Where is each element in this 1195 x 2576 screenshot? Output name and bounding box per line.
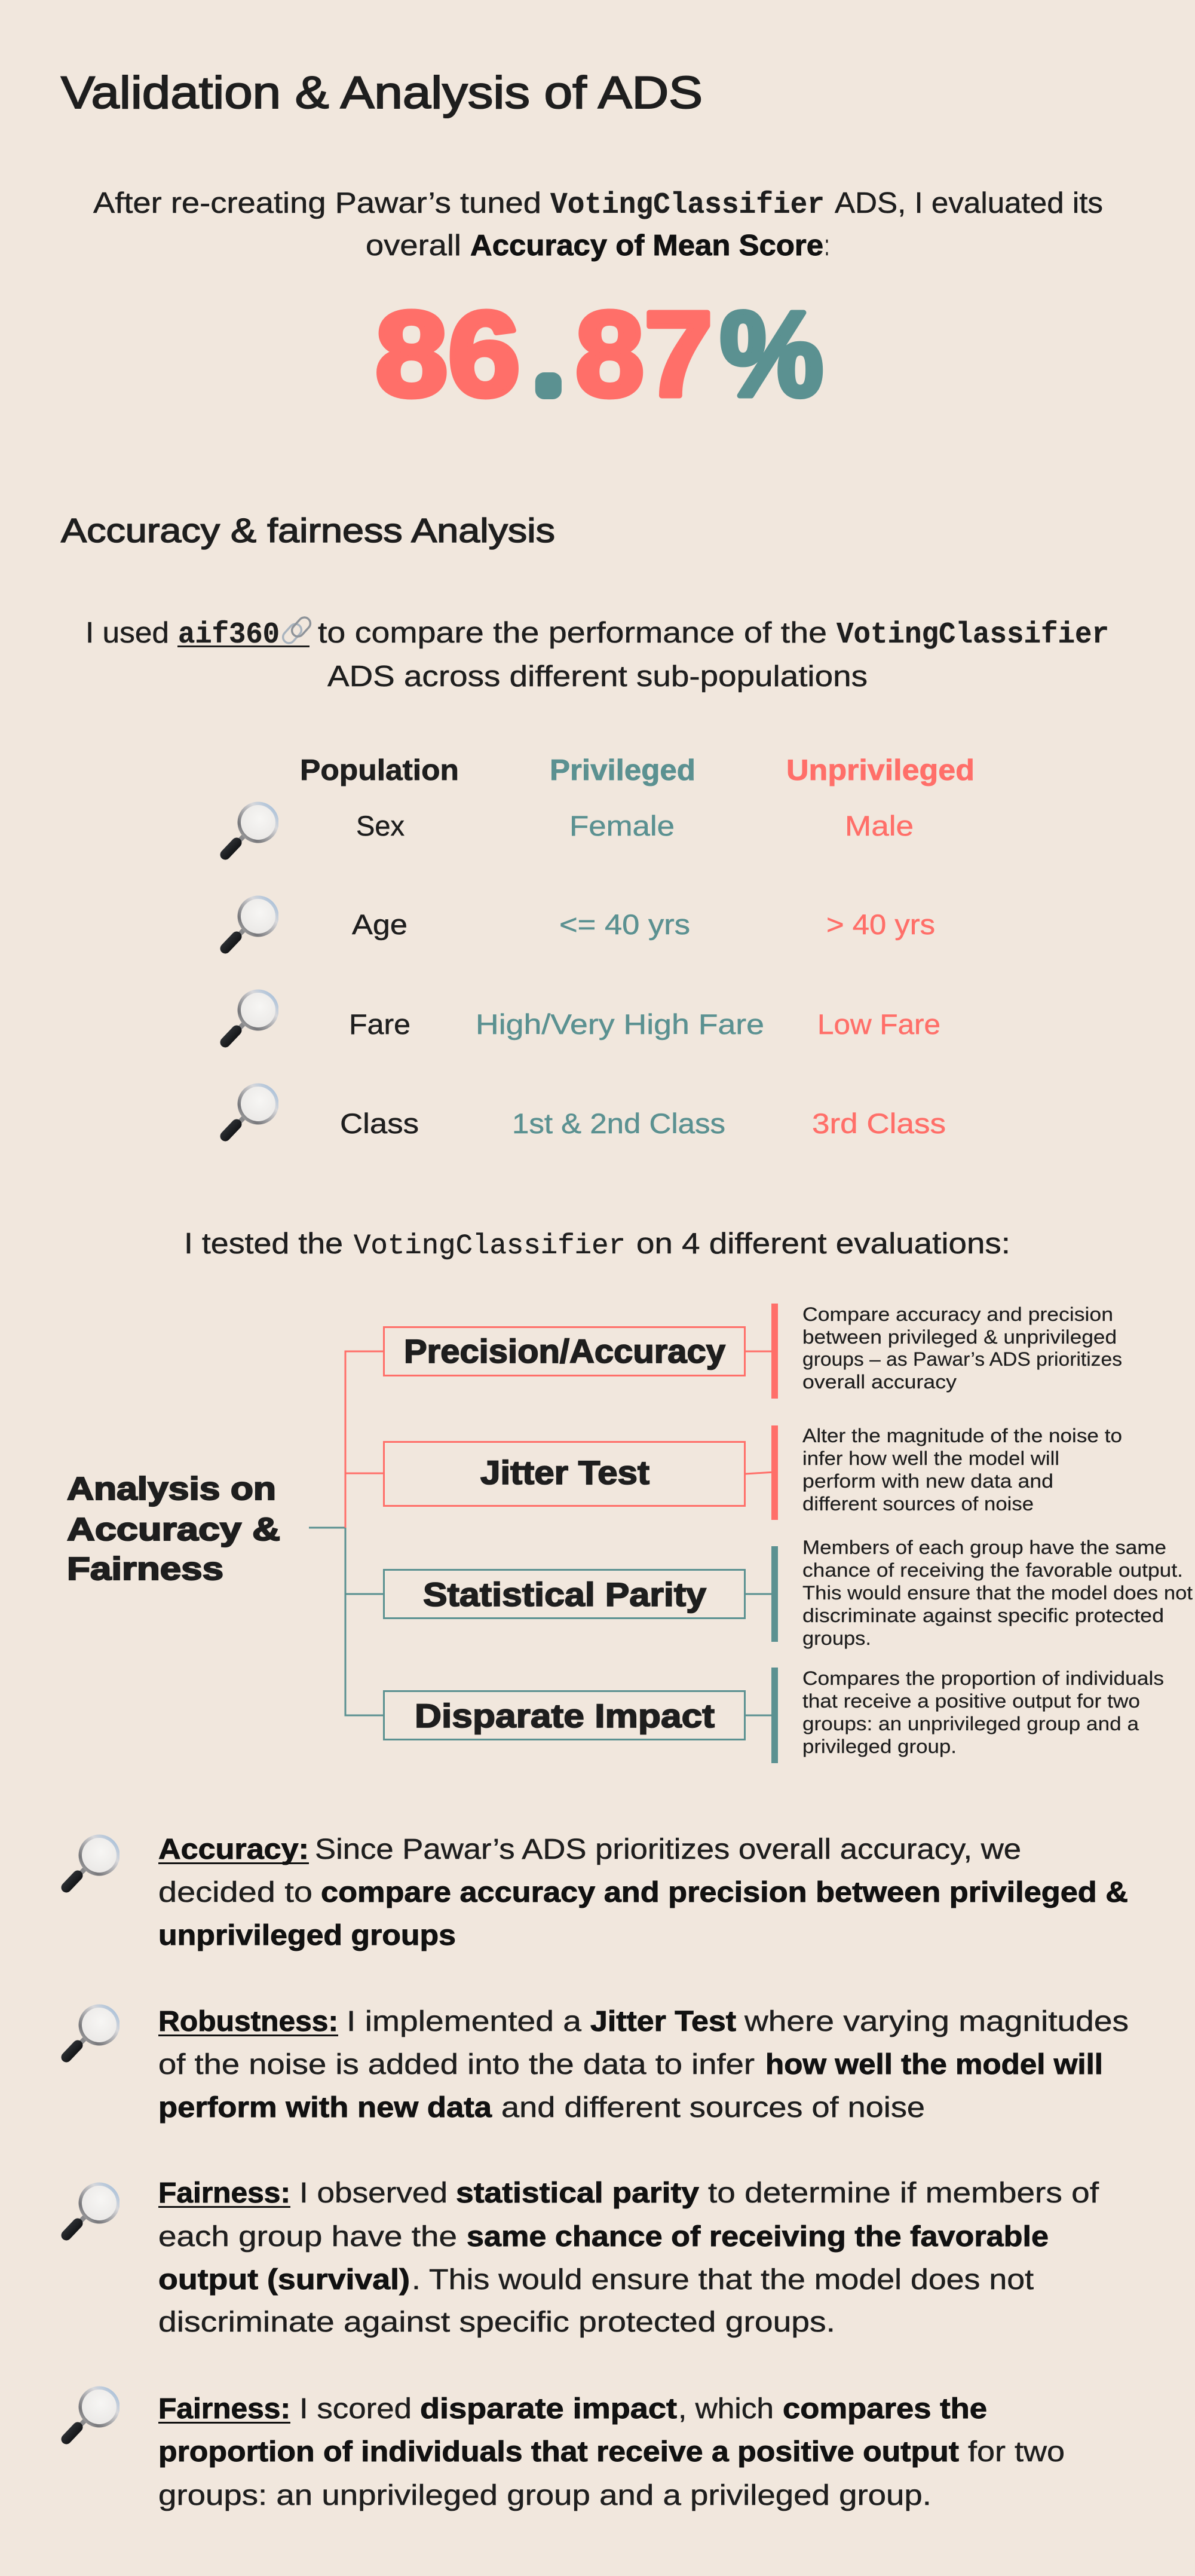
icon: magnifier — [225, 1083, 278, 1136]
aif360 text: to compare the performance of the — [318, 617, 827, 649]
intro text: VotingClassifier — [550, 188, 825, 222]
evaluations intro text — [184, 1228, 1010, 1262]
text block: robustness: Robustness: — [158, 2006, 338, 2037]
diagram: analysis tree — [67, 1304, 1193, 1763]
text block: accuracy: Accuracy: — [158, 1834, 309, 1865]
icon: magnifier — [225, 802, 278, 855]
aif360 text — [85, 615, 1109, 693]
branch: disparate impact: Disparate Impact — [415, 1697, 715, 1734]
intro text: ADS, I evaluated its — [835, 187, 1103, 219]
evaluations intro text: I tested the — [184, 1228, 343, 1260]
intro text: overall — [366, 230, 461, 262]
big accuracy number: 86 — [375, 286, 520, 421]
text block: fairness, statistical parity — [158, 2177, 1099, 2338]
intro text — [93, 187, 1103, 262]
connectors: tree — [309, 1351, 774, 1715]
branch: precision/accuracy: overall accuracy — [802, 1371, 957, 1393]
row: class — [340, 1108, 946, 1139]
row: sex: Male — [845, 810, 914, 842]
text block: accuracy — [158, 1834, 1128, 1951]
row: class: Class — [340, 1108, 419, 1139]
aif360 text: ADS across different sub-populations — [327, 660, 868, 693]
text block: fairness, disparate impact: compares the — [783, 2393, 987, 2425]
row: age: Age — [352, 908, 407, 940]
icon: magnifier — [66, 2386, 120, 2439]
text block: robustness: I implemented a — [347, 2006, 581, 2037]
text block: fairness, disparate impact: Fairness: — [158, 2393, 290, 2425]
text block: robustness: of the noise is added into the data to infer — [158, 2049, 755, 2081]
text block: fairness, statistical parity: output (survival) — [158, 2264, 410, 2296]
row: age: > 40 yrs — [826, 908, 935, 940]
branch: statistical parity: groups. — [802, 1627, 871, 1649]
branch: statistical parity: discriminate against specific protected — [802, 1605, 1164, 1626]
title: Validation & Analysis of ADS — [61, 68, 703, 118]
row: fare — [349, 1008, 940, 1040]
text block: fairness, statistical parity: discriminate against specific protected groups. — [158, 2306, 835, 2338]
text block: robustness: how well the model will — [765, 2049, 1103, 2081]
row: age — [352, 908, 935, 940]
row: fare: Fare — [349, 1008, 410, 1040]
intro text: : — [825, 230, 829, 262]
intro text: After re-creating Pawar’s tuned — [93, 187, 541, 219]
branch: disparate impact: Compares the proportion of individuals — [802, 1668, 1164, 1689]
row: sex: Sex — [356, 810, 405, 842]
icon: magnifier — [225, 895, 278, 949]
table: populations — [225, 754, 975, 1139]
row: sex — [356, 810, 914, 842]
table header: Population — [300, 754, 459, 787]
branch: statistical parity: chance of receiving the favorable output. — [802, 1559, 1183, 1581]
branch: precision/accuracy: Precision/Accuracy — [404, 1332, 725, 1370]
branch: disparate impact: groups: an unprivileged group and a — [802, 1713, 1139, 1734]
evaluations intro text: on 4 different evaluations: — [636, 1228, 1010, 1260]
branch: disparate impact: that receive a positive output for two — [802, 1690, 1140, 1712]
text block: fairness, statistical parity: statistical parity — [456, 2177, 699, 2209]
branch: jitter test: infer how well the model will — [802, 1448, 1059, 1469]
icon: magnifier — [66, 2005, 120, 2057]
branch: statistical parity: Members of each group have the same — [802, 1537, 1166, 1558]
icon: magnifier — [66, 1835, 120, 1887]
text block: robustness — [158, 2006, 1129, 2124]
branch: statistical parity: Statistical Parity — [423, 1575, 706, 1613]
branch: jitter test: Alter the magnitude of the noise to — [802, 1425, 1122, 1446]
diagram root label: Fairness — [67, 1551, 223, 1587]
section heading: Accuracy & fairness Analysis — [61, 512, 555, 550]
text block: fairness, disparate impact: for two — [968, 2436, 1065, 2468]
branch: jitter test: perform with new data and — [802, 1470, 1053, 1492]
row: fare: Low Fare — [817, 1008, 940, 1040]
big accuracy number: % — [720, 286, 823, 421]
text block: accuracy: unprivileged groups — [158, 1920, 456, 1951]
text block: fairness, statistical parity: to determine if members of — [708, 2177, 1099, 2209]
table header: Unprivileged — [786, 754, 975, 787]
text block: accuracy: compare accuracy and precision between privileged & — [321, 1877, 1128, 1908]
big accuracy number: 87 — [575, 286, 713, 421]
big accuracy number — [375, 286, 823, 421]
text block: robustness: perform with new data — [158, 2092, 492, 2124]
diagram root label: Accuracy & — [67, 1512, 280, 1547]
branch: jitter test — [384, 1425, 1122, 1520]
text block: fairness, statistical parity: Fairness: — [158, 2177, 290, 2209]
row: fare: High/Very High Fare — [476, 1008, 764, 1040]
text block: fairness, disparate impact — [158, 2393, 1065, 2511]
text block: fairness, statistical parity: each group have the — [158, 2221, 457, 2253]
text block: robustness: and different sources of noise — [501, 2092, 925, 2124]
text block: fairness, statistical parity: I observed — [299, 2177, 448, 2209]
branch: jitter test: Jitter Test — [480, 1454, 649, 1491]
text block: fairness, disparate impact: proportion of individuals that receive a positive output — [158, 2436, 959, 2468]
table header — [300, 754, 975, 787]
aif360 text: aif360 — [178, 618, 280, 652]
branch: disparate impact: privileged group. — [802, 1736, 957, 1757]
row: sex: Female — [569, 810, 675, 842]
branch: precision/accuracy — [384, 1304, 1122, 1399]
text block: fairness, disparate impact: I scored — [299, 2393, 412, 2425]
icon: magnifier — [225, 990, 278, 1042]
text block: accuracy: Since Pawar’s ADS prioritizes overall accuracy, we — [315, 1834, 1021, 1865]
branch: jitter test: different sources of noise — [802, 1493, 1034, 1515]
big accuracy number: . — [540, 336, 557, 403]
branch: precision/accuracy: between privileged & unprivileged — [802, 1326, 1117, 1348]
aif360 text: I used — [85, 617, 169, 649]
intro text: Accuracy of Mean Score — [470, 230, 823, 262]
branch: statistical parity: This would ensure that the model does not — [802, 1582, 1193, 1604]
icon: magnifier — [66, 2183, 120, 2235]
aif360 text: VotingClassifier — [836, 618, 1109, 652]
branch: precision/accuracy: Compare accuracy and precision — [802, 1304, 1113, 1325]
diagram root label — [67, 1471, 280, 1587]
diagram root label: Analysis on — [67, 1471, 276, 1507]
branch: disparate impact — [384, 1668, 1164, 1763]
text block: fairness, disparate impact: , which — [678, 2393, 774, 2425]
row: class: 1st & 2nd Class — [512, 1108, 725, 1139]
text block: robustness: where varying magnitudes — [744, 2006, 1129, 2037]
text block: robustness: Jitter Test — [590, 2006, 736, 2037]
table header: Privileged — [550, 754, 695, 787]
text block: fairness, statistical parity: same chance of receiving the favorable — [467, 2221, 1049, 2253]
row: class: 3rd Class — [812, 1108, 946, 1139]
text block: fairness, statistical parity: . This would ensure that the model does not — [412, 2264, 1034, 2296]
icon: link — [281, 615, 312, 645]
text block: fairness, disparate impact: disparate impact — [420, 2393, 677, 2425]
evaluations intro text: VotingClassifier — [354, 1231, 626, 1262]
row: age: <= 40 yrs — [559, 908, 690, 940]
text block: fairness, disparate impact: groups: an unprivileged group and a privileged group. — [158, 2480, 932, 2511]
text block: accuracy: decided to — [158, 1877, 312, 1908]
branch: precision/accuracy: groups – as Pawar’s ADS prioritizes — [802, 1348, 1122, 1370]
branch: statistical parity — [384, 1537, 1193, 1649]
